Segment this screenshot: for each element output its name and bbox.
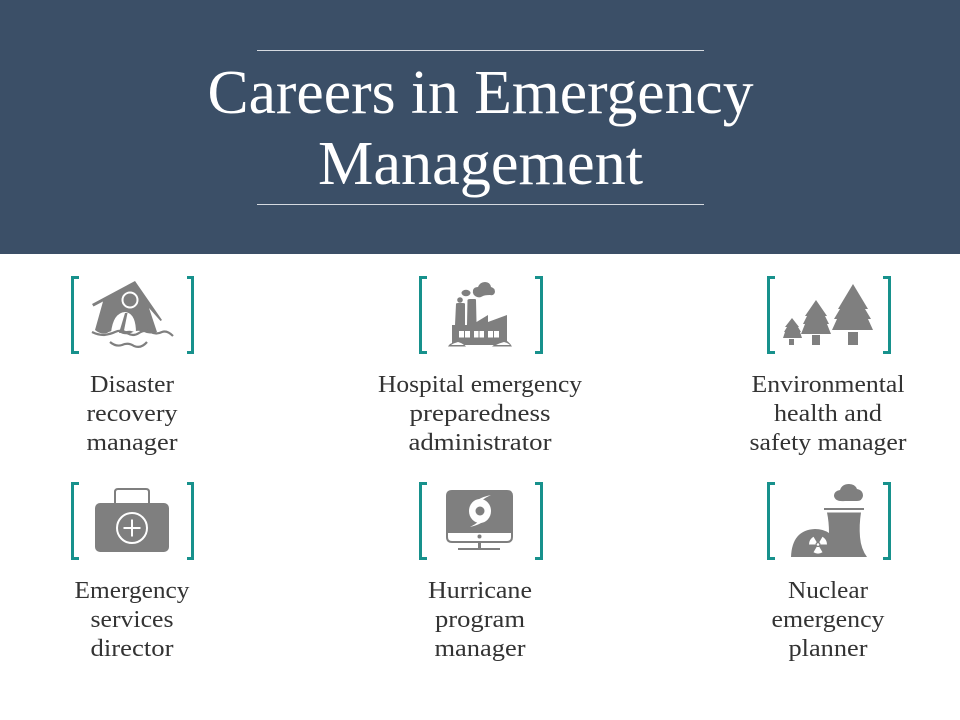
- label: safety manager: [750, 429, 906, 456]
- card: nuclear emergency planner: [768, 484, 890, 662]
- label: services: [90, 606, 174, 633]
- label: preparedness: [410, 400, 550, 427]
- label: Hospital emergency: [378, 371, 583, 398]
- label: Disaster: [90, 371, 174, 398]
- label: Environmental: [752, 371, 905, 398]
- card: emergency services director: [72, 484, 192, 662]
- icon: nuclear plant: [791, 484, 867, 557]
- brackets: [420, 278, 542, 352]
- card: hospital emergency preparedness administrator: [378, 278, 583, 456]
- icon: trees: [783, 284, 873, 345]
- brackets: [768, 484, 890, 558]
- card: hurricane program manager: [420, 484, 542, 662]
- label: manager: [86, 429, 178, 456]
- title: Management: [318, 130, 643, 198]
- label: administrator: [408, 429, 552, 456]
- icon: monitor with hurricane: [446, 490, 513, 550]
- label: manager: [434, 635, 526, 662]
- card: environmental health and safety manager: [750, 278, 906, 456]
- icon: first aid kit: [95, 489, 169, 552]
- header banner: [0, 0, 960, 254]
- label: [428, 577, 532, 662]
- label: emergency: [772, 606, 885, 633]
- title: Careers in Emergency: [208, 59, 754, 127]
- card: disaster recovery manager: [72, 278, 192, 456]
- brackets: [72, 278, 192, 352]
- label: [772, 577, 885, 662]
- label: [86, 371, 178, 456]
- title: [208, 59, 754, 198]
- label: Nuclear: [788, 577, 868, 604]
- brackets: [768, 278, 890, 352]
- label: director: [90, 635, 174, 662]
- brackets: [72, 484, 192, 558]
- label: planner: [788, 635, 868, 662]
- label: program: [435, 606, 525, 633]
- label: Emergency: [74, 577, 190, 604]
- label: health and: [774, 400, 882, 427]
- label: recovery: [86, 400, 178, 427]
- label: Hurricane: [428, 577, 532, 604]
- label: [750, 371, 906, 456]
- icon: flooded house: [92, 281, 173, 347]
- label: [74, 577, 190, 662]
- icon: factory: [448, 282, 512, 346]
- label: [378, 371, 583, 456]
- brackets: [420, 484, 542, 558]
